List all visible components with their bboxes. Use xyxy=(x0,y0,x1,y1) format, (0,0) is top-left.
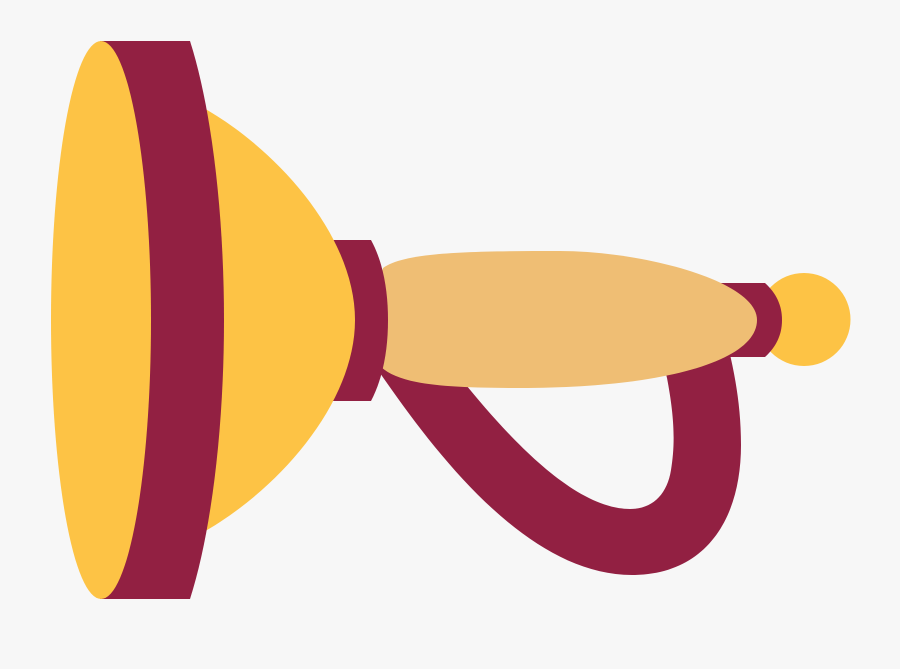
bell rim xyxy=(100,41,224,599)
tube loop xyxy=(375,350,741,575)
bell opening xyxy=(51,41,151,599)
bell cone xyxy=(200,106,355,534)
bell collar xyxy=(330,240,388,401)
mouthpiece ball xyxy=(758,273,850,366)
mouthpiece collar xyxy=(700,283,782,357)
tube body xyxy=(370,251,757,388)
